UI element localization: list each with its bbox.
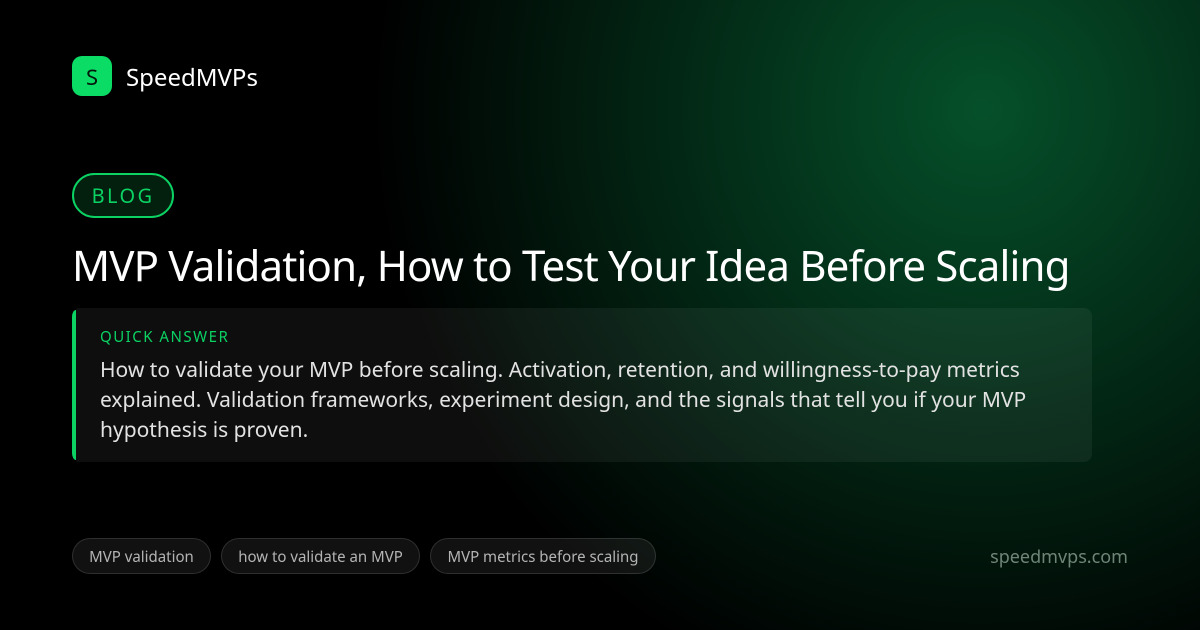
accent bar xyxy=(72,310,76,460)
badge: blog: BLOG xyxy=(92,182,154,209)
title: MVP Validation, How to Test Your Idea Before Scaling xyxy=(72,237,1070,294)
answer text xyxy=(100,356,1026,444)
badge: blog xyxy=(72,173,174,218)
answer text: hypothesis is proven. xyxy=(100,416,308,444)
icon: S mark: S xyxy=(86,62,98,92)
logo xyxy=(72,56,258,96)
tag: how to validate an MVP: how to validate an MVP xyxy=(238,547,403,567)
tag: MVP validation: MVP validation xyxy=(89,547,194,567)
panel background xyxy=(76,308,1092,462)
site url: speedmvps.com xyxy=(990,545,1128,569)
tag: how to validate an MVP xyxy=(221,538,420,574)
label: QUICK ANSWER xyxy=(100,327,229,347)
tag: MVP metrics before scaling: MVP metrics before scaling xyxy=(447,547,639,567)
brand name: SpeedMVPs xyxy=(126,61,258,94)
tag: MVP metrics before scaling xyxy=(430,538,656,574)
panel: quick answer xyxy=(72,308,1092,462)
icon: S mark xyxy=(72,56,112,96)
answer text: explained. Validation frameworks, experiment design, and the signals that tell you if your MVP xyxy=(100,386,1026,414)
tag: MVP validation xyxy=(72,538,211,574)
answer text: How to validate your MVP before scaling. Activation, retention, and willingness-to-pay metrics xyxy=(100,356,1020,384)
